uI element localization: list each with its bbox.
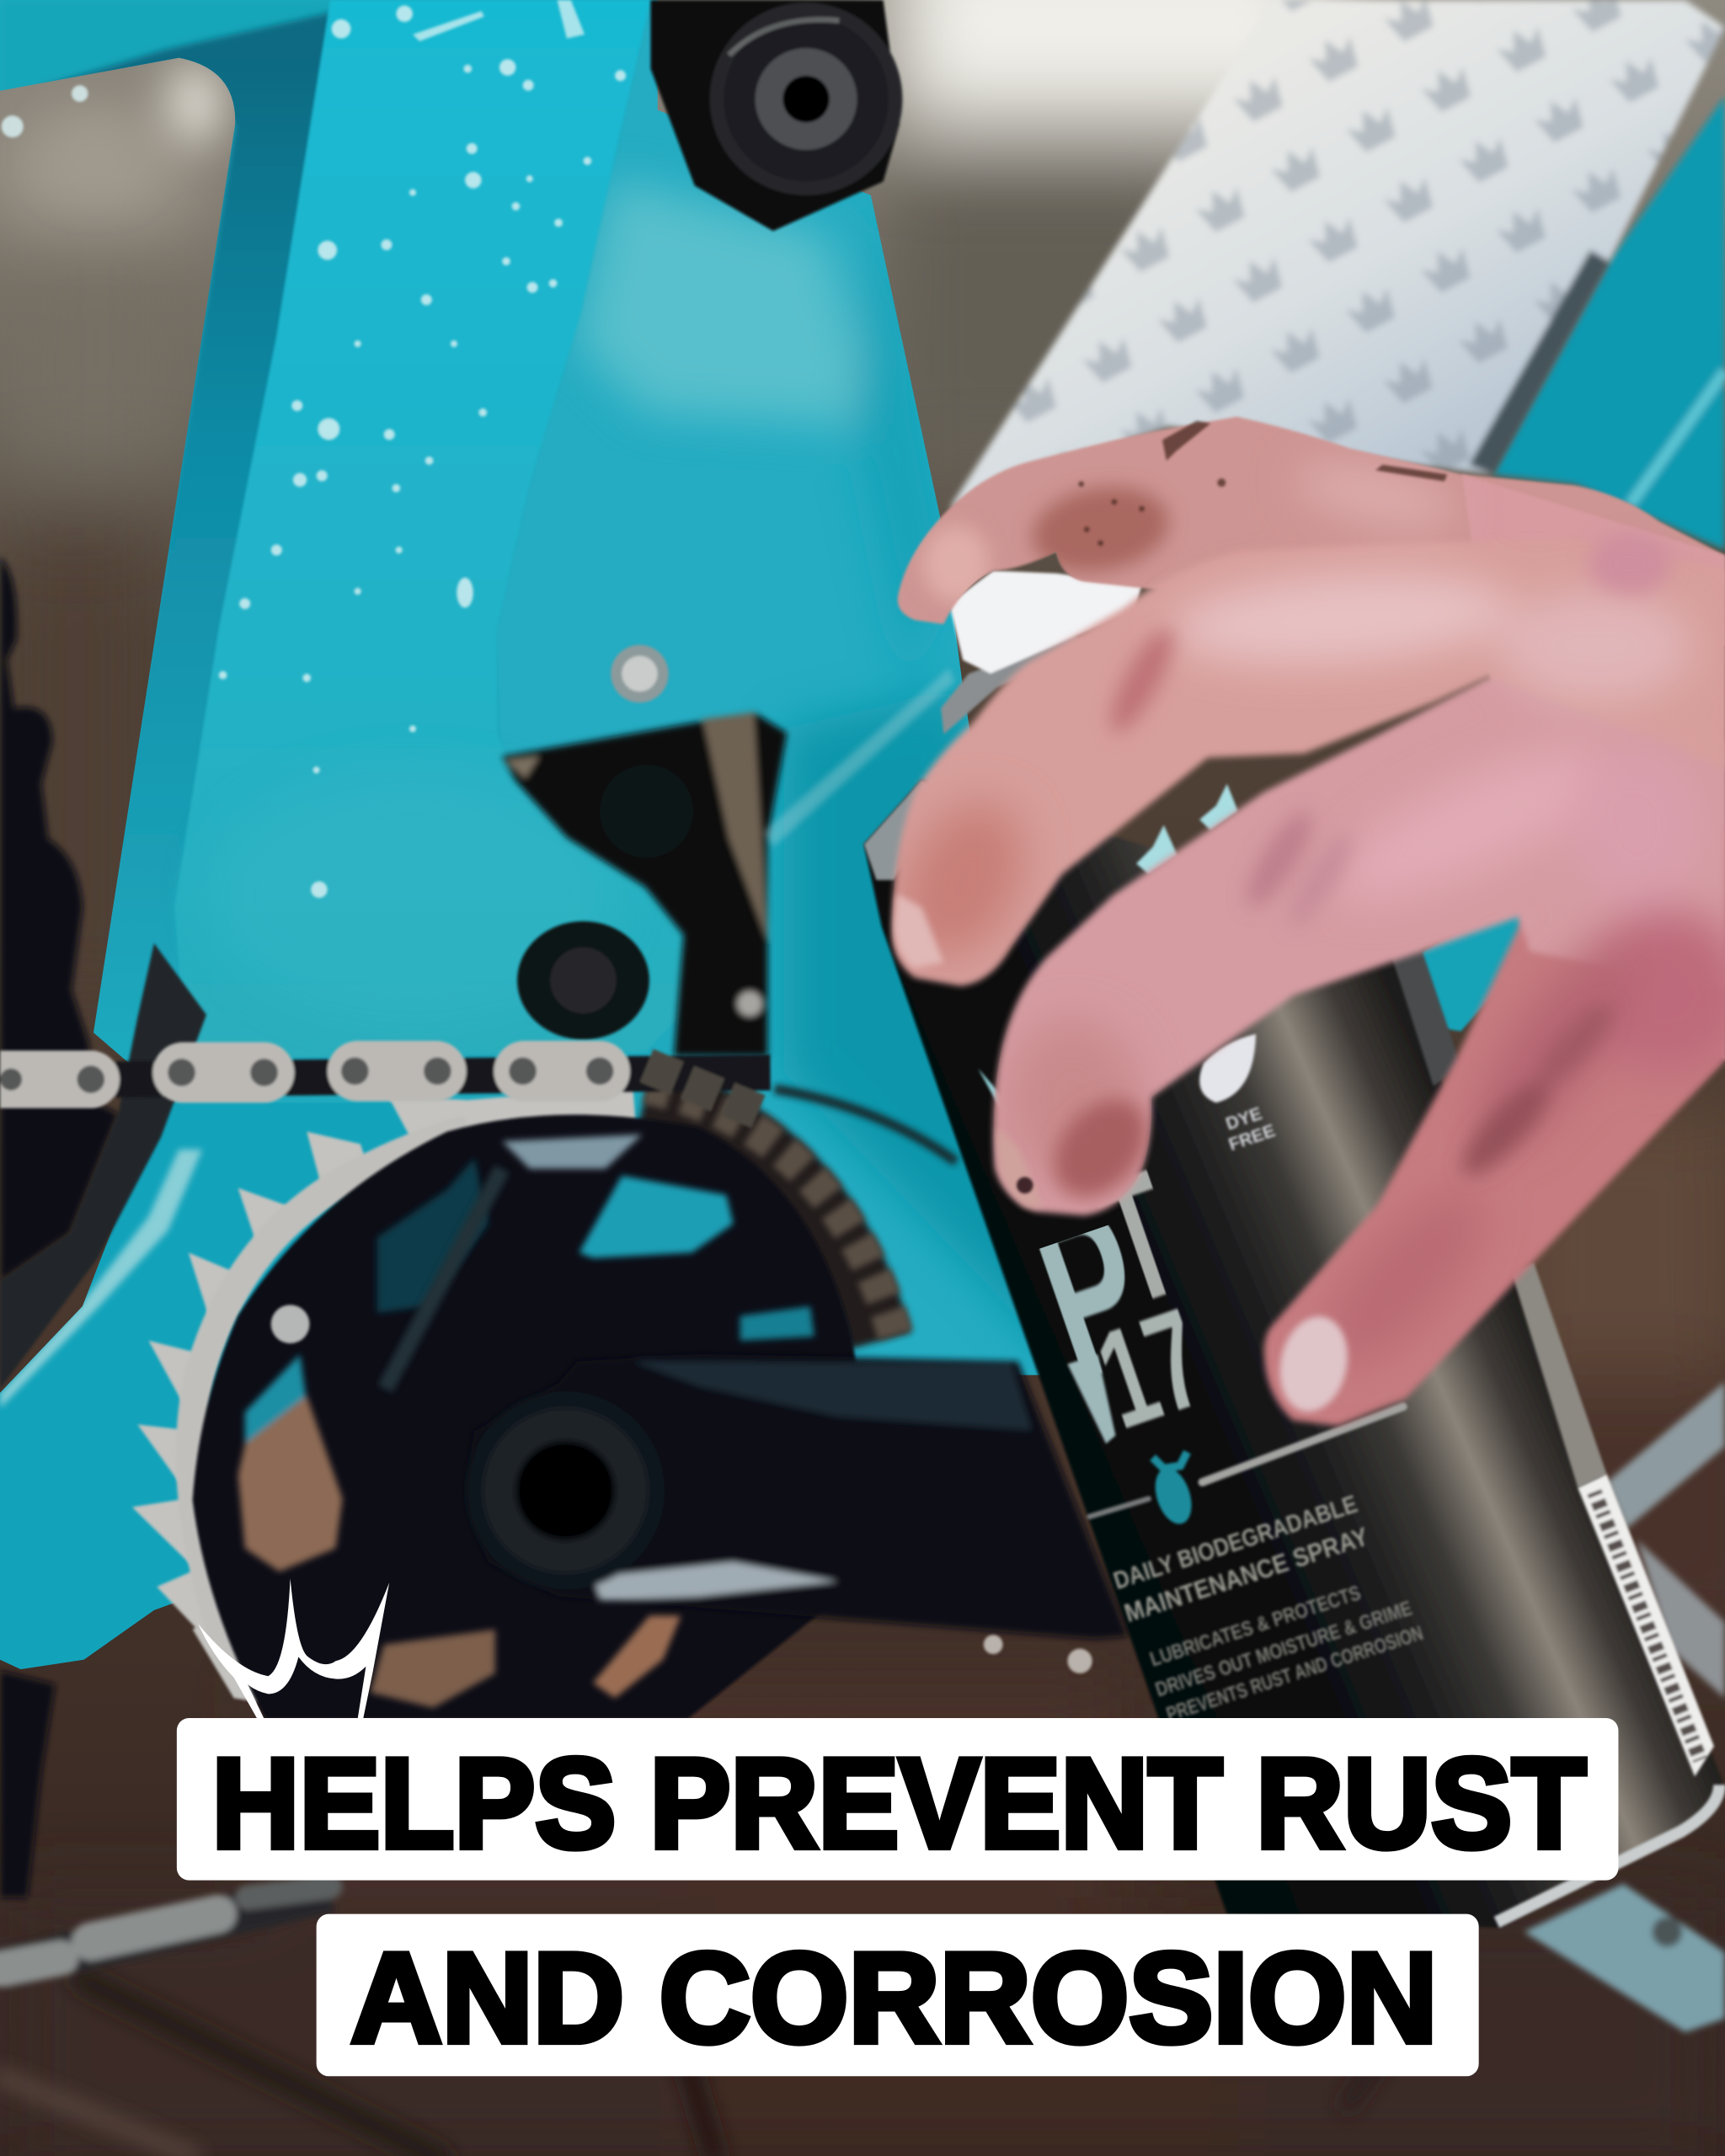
callout: helps prevent rust	[177, 1718, 1618, 1881]
hand	[879, 417, 1725, 1426]
label divider	[1089, 1406, 1403, 1517]
nozzle collar	[941, 635, 1101, 734]
light sprayed patch	[578, 179, 1087, 1389]
can bottom rim	[1497, 1785, 1719, 1922]
product description: LUBRICATES & PROTECTS	[1147, 1582, 1364, 1671]
spray can	[864, 571, 1722, 1928]
panel: rear teal tube	[1493, 96, 1725, 550]
cable behind	[774, 1089, 956, 1162]
back of hand	[1462, 474, 1725, 1060]
chainstay	[0, 1102, 426, 1669]
bottom left black part	[0, 1671, 55, 1897]
shock mount and pivot bolt	[650, 0, 902, 231]
crank arm	[467, 1354, 1128, 1639]
product description: DRIVES OUT MOISTURE & GRIME	[1153, 1597, 1415, 1701]
heading line 1: HELPS PREVENT RUST	[212, 1732, 1586, 1875]
thumb on nozzle	[898, 417, 1725, 646]
main body tint	[657, 0, 1039, 1375]
left black sprocket cluster	[0, 557, 118, 1282]
third finger	[994, 676, 1725, 1215]
spider arm highlight	[385, 1169, 502, 1389]
panel: wrapped white down tube	[949, 0, 1725, 509]
dye free label: FREE	[1226, 1121, 1278, 1155]
bright lit strut	[174, 0, 684, 1059]
crown marks on shoulder	[1136, 784, 1238, 874]
third fingertip grime	[1017, 1177, 1033, 1193]
upper chain	[0, 1041, 771, 1113]
QR code strip	[1390, 935, 1461, 1086]
spray mist	[763, 668, 954, 847]
product number 17: 17	[1081, 1280, 1222, 1459]
silver teeth	[132, 1086, 636, 1705]
teal arrow mark	[978, 1069, 1006, 1111]
product description: DAILY BIODEGRADABLE	[1110, 1490, 1361, 1595]
dye free label	[1224, 1104, 1278, 1155]
chrome streaks at frame top	[413, 0, 585, 41]
bolt: black lower pivot	[517, 921, 649, 1039]
wrench logo	[1149, 1452, 1198, 1529]
silver ring band	[191, 1130, 467, 1664]
callout: and corrosion	[317, 1914, 1479, 2076]
barcode	[1578, 1474, 1714, 1776]
product name P: P	[1006, 1149, 1177, 1430]
chainstay shine	[0, 1150, 202, 1408]
droplets below crank	[984, 1635, 1092, 1673]
pinky finger	[1264, 825, 1725, 1426]
water droplets on frame	[2, 6, 626, 898]
nozzle	[949, 571, 1142, 674]
lower chain	[0, 1886, 330, 1969]
product description	[1110, 1490, 1426, 1726]
fine print strip	[1512, 1262, 1607, 1488]
heading line 2: AND CORROSION	[350, 1928, 1438, 2069]
chainring body	[193, 1115, 867, 1719]
leaf icon: dye free	[1199, 1034, 1256, 1102]
background teal seen between fingers	[1403, 900, 1547, 1031]
rear dark blurred teeth	[647, 1086, 897, 1341]
product description: MAINTENANCE SPRAY	[1121, 1521, 1372, 1628]
silver shoulder ring	[864, 780, 943, 880]
chainring	[132, 1086, 897, 1719]
bike tubes and pedal at right	[1525, 1382, 1725, 2032]
third fingernail	[996, 1128, 1043, 1207]
pinky nail	[1271, 1310, 1356, 1418]
bolt: silver linkage bolt	[611, 645, 669, 702]
rubber chain guard	[0, 943, 206, 1389]
second finger	[893, 539, 1725, 986]
bright lower shine	[206, 770, 619, 1017]
product description: PREVENTS RUST AND CORROSION	[1164, 1622, 1426, 1726]
dark shaded strut	[42, 10, 329, 1059]
panel: teal bike frame	[0, 0, 1101, 1691]
skin shading	[879, 456, 1725, 1388]
frame window with shock linkage	[502, 712, 787, 1056]
spider openings	[238, 1134, 814, 1708]
icon: white crown logo	[198, 1578, 389, 1719]
grime on thumb	[1078, 421, 1447, 546]
chainring bolt	[271, 1305, 309, 1343]
rear blurred dark band	[647, 1093, 880, 1341]
can body	[864, 780, 1722, 1928]
P tail	[1067, 1354, 1116, 1444]
dye free label: DYE	[1224, 1104, 1264, 1134]
top tube band	[0, 0, 337, 96]
product name T: T	[1078, 1133, 1200, 1342]
second fingernail	[894, 894, 943, 968]
